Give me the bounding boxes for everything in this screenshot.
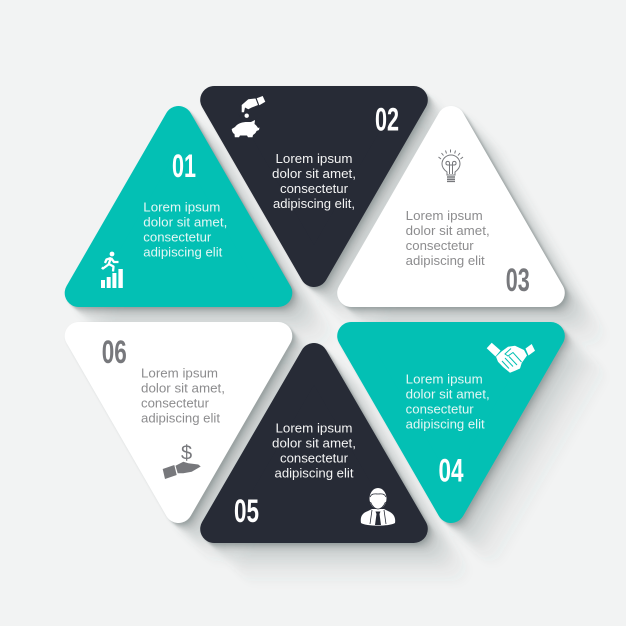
icon: hand dropping coin into piggy bank	[232, 96, 265, 137]
triangle 06	[79, 336, 278, 509]
panel: step 06	[79, 334, 278, 509]
panel: step 01	[79, 120, 278, 293]
panel: step 05	[214, 357, 414, 529]
text 03: adipiscing elit	[406, 253, 485, 268]
text 04: adipiscing elit	[406, 416, 485, 431]
text 02	[272, 151, 356, 211]
text 02: adipiscing elit,	[273, 196, 355, 211]
text 01: Lorem ipsum	[143, 200, 220, 214]
text 01: dolor sit amet,	[143, 214, 227, 230]
icon: hand holding dollar	[163, 442, 201, 479]
text 06: adipiscing elit	[141, 410, 220, 425]
text 03: Lorem ipsum	[406, 208, 483, 223]
number 04: 04	[438, 453, 464, 489]
text 04	[406, 371, 490, 431]
panel: step 04	[351, 336, 551, 509]
text 05	[272, 421, 356, 481]
long shadows	[80, 101, 593, 571]
text 04: dolor sit amet,	[406, 386, 490, 401]
triangle 04	[351, 336, 551, 509]
text 03: dolor sit amet,	[406, 223, 490, 238]
icon: light bulb	[438, 150, 463, 181]
text 03	[406, 208, 490, 268]
triangle 02	[214, 100, 414, 273]
text 01: consectetur	[143, 230, 212, 244]
icon: handshake	[487, 343, 535, 373]
icon: businessman	[361, 488, 395, 526]
icon: runner on rising bars	[101, 252, 123, 288]
number 03: 03	[506, 262, 530, 298]
text 06: Lorem ipsum	[141, 365, 218, 380]
text 05: Lorem ipsum	[276, 421, 352, 436]
triangle 03	[351, 120, 551, 293]
text 03: consectetur	[406, 238, 474, 253]
text 01: adipiscing elit	[143, 244, 223, 260]
text 04: Lorem ipsum	[406, 371, 483, 386]
text 04: consectetur	[406, 401, 474, 416]
triangle 01	[79, 120, 278, 293]
text 05: consectetur	[280, 451, 349, 466]
panel: step 03	[351, 120, 551, 298]
text 06: dolor sit amet,	[141, 380, 225, 395]
number 02: 02	[375, 102, 399, 138]
text 02: Lorem ipsum	[276, 151, 352, 166]
panel: step 02	[214, 96, 414, 273]
text 02: consectetur	[280, 181, 349, 196]
text 02: dolor sit amet,	[272, 166, 356, 181]
number 05: 05	[234, 493, 259, 529]
text 01	[143, 200, 227, 260]
text 06: consectetur	[141, 395, 210, 410]
text 05: adipiscing elit	[274, 466, 354, 481]
icon: hand holding dollar: $	[181, 442, 192, 464]
text 06	[141, 365, 225, 425]
number 01: 01	[172, 148, 196, 184]
text 05: dolor sit amet,	[272, 436, 356, 451]
triangle 05	[214, 357, 414, 529]
number 06: 06	[102, 334, 127, 370]
